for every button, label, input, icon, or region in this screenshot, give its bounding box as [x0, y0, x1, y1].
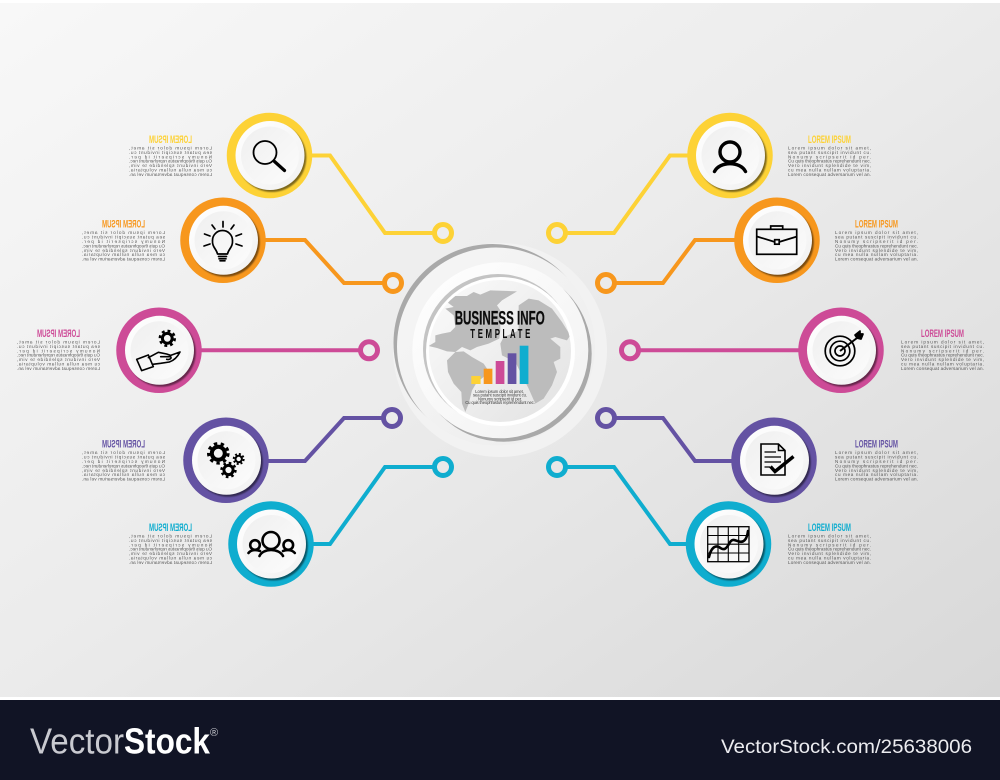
text block: sea putant suscipit invidunt cu.	[129, 150, 212, 155]
text block: Nonumy scripserit id per.	[82, 239, 165, 244]
text block: LOREM IPSUM	[855, 439, 898, 451]
coloured ring	[231, 117, 308, 194]
text block: cu mea nulla nullam voluptaria.	[788, 168, 871, 172]
text block: Lorem consequat adversarium vel an.	[901, 366, 984, 371]
coloured ring	[692, 117, 768, 194]
disc shadow	[239, 512, 308, 580]
panel: left pink node	[17, 312, 377, 389]
text block: Vero invidunt splendide te vim,	[82, 468, 165, 473]
white disc	[192, 426, 261, 495]
disc shadow	[809, 318, 878, 387]
white disc	[807, 316, 876, 385]
text block	[17, 328, 100, 371]
panel: right teal node	[548, 458, 871, 582]
connector	[566, 467, 695, 544]
text block	[835, 219, 918, 262]
world map continents	[429, 290, 570, 412]
centre caption: sea putant suscipit invidunt cu.	[473, 393, 527, 398]
text block: sea putant suscipit invidunt cu.	[82, 235, 165, 240]
coloured ring	[184, 202, 262, 279]
text block: Cu quis theophrastus reprehendunt nec.	[835, 463, 918, 468]
text block: Lorem ipsum dolor sit amet,	[835, 230, 918, 235]
text block: LOREM IPSUM	[102, 439, 145, 451]
text block: sea putant suscipit invidunt cu.	[17, 344, 100, 349]
end ring	[548, 224, 566, 242]
panel: left yellow node	[129, 117, 452, 242]
text block: Nonumy scripserit id per.	[129, 154, 212, 159]
grey crescent top-left	[394, 244, 592, 442]
inner face	[242, 515, 300, 573]
disc shadow	[745, 208, 814, 277]
text block: Lorem consequat adversarium vel an.	[788, 560, 871, 565]
disc shadow	[237, 123, 306, 192]
icon: line chart on grid	[708, 527, 749, 562]
footer logo: Vector	[30, 720, 124, 762]
text block: Cu quis theophrastus reprehendunt nec.	[835, 243, 918, 248]
coloured ring	[188, 422, 264, 499]
panel: central globe	[393, 243, 607, 457]
coloured ring	[738, 202, 816, 279]
panel: left orange node	[82, 202, 401, 292]
pale disc covering crescent	[397, 248, 595, 446]
text block: LOREM IPSUM	[149, 522, 192, 534]
text block: Cu quis theophrastus reprehendunt nec.	[788, 547, 871, 552]
end ring	[622, 342, 638, 359]
text block: Nonumy scripserit id per.	[835, 239, 918, 244]
text block: LOREM IPSUM	[102, 219, 145, 231]
text block	[788, 522, 871, 565]
globe rim white	[426, 277, 575, 426]
text block: Cu quis theophrastus reprehendunt nec.	[82, 243, 165, 248]
icon: magnifier	[254, 141, 284, 170]
text block	[835, 439, 918, 482]
text block: sea putant suscipit invidunt cu.	[129, 538, 212, 543]
inner face	[748, 211, 806, 269]
inner face	[812, 321, 870, 379]
text block: sea putant suscipit invidunt cu.	[901, 344, 984, 349]
connector	[258, 240, 384, 283]
icon: person	[714, 142, 746, 172]
connector	[615, 418, 740, 461]
white disc	[236, 121, 304, 190]
text block: LOREM IPSUM	[37, 328, 80, 340]
text block: sea putant suscipit invidunt cu.	[835, 235, 918, 240]
text block: LOREM IPSUM	[149, 134, 192, 146]
end ring	[360, 342, 378, 359]
centre caption: Nonumy scripserit id per.	[478, 396, 522, 401]
text block: LOREM IPSUM	[855, 219, 898, 231]
footer band	[0, 700, 1000, 780]
text block: Lorem ipsum dolor sit amet,	[129, 146, 212, 150]
inner face	[198, 431, 256, 489]
panel: right purple node	[598, 410, 918, 499]
text block	[129, 522, 212, 565]
globe face	[429, 280, 571, 422]
panel: right pink node	[622, 312, 984, 389]
connector	[195, 348, 360, 352]
text block: LOREM IPSUM	[808, 522, 851, 534]
text block: Lorem consequat adversarium vel an.	[17, 366, 100, 371]
text block: cu mea nulla nullam voluptaria.	[835, 472, 918, 477]
footer logo: Stock	[124, 720, 211, 762]
text block: Lorem consequat adversarium vel an.	[835, 257, 918, 262]
panel: right yellow node	[548, 117, 871, 242]
connector	[639, 348, 806, 352]
inner face	[130, 321, 188, 379]
icon: hand holding gear	[137, 331, 180, 371]
centre caption: Cu quis theophrastus reprehendunt nec.	[465, 400, 535, 405]
text block: Lorem ipsum dolor sit amet,	[17, 340, 100, 344]
text block: Lorem ipsum dolor sit amet,	[788, 534, 871, 538]
text block: sea putant suscipit invidunt cu.	[788, 538, 871, 543]
white disc	[189, 206, 258, 275]
white disc	[740, 426, 809, 495]
panel: left purple node	[82, 410, 400, 499]
text block: Vero invidunt splendide te vim,	[835, 248, 918, 253]
connector	[615, 240, 742, 283]
centre caption	[465, 389, 535, 405]
text block: LOREM IPSUM	[921, 328, 964, 340]
end ring	[384, 274, 402, 292]
panel: left teal node	[129, 458, 452, 582]
text block: Lorem consequat adversarium vel an.	[82, 257, 165, 262]
text block: Nonumy scripserit id per.	[17, 348, 100, 353]
disc shadow	[191, 208, 260, 277]
end ring	[434, 458, 452, 476]
disc shadow	[127, 318, 196, 387]
text block: Lorem ipsum dolor sit amet,	[129, 534, 212, 538]
text block: Lorem ipsum dolor sit amet,	[82, 230, 165, 235]
inner face	[241, 126, 299, 184]
white disc	[125, 316, 194, 385]
inner face	[194, 211, 252, 269]
globe rim crescent	[423, 274, 573, 424]
icon: target with arrow	[825, 331, 863, 366]
connector	[566, 156, 695, 233]
bar chart	[471, 346, 528, 384]
disc shadow	[194, 428, 263, 497]
text block: Lorem consequat adversarium vel an.	[129, 172, 212, 177]
text block: Nonumy scripserit id per.	[82, 459, 165, 464]
disc shadow	[742, 428, 811, 497]
text block: Lorem ipsum dolor sit amet,	[788, 146, 871, 150]
end ring	[548, 458, 566, 476]
text block: cu mea nulla nullam voluptaria.	[17, 362, 100, 366]
text block: Cu quis theophrastus reprehendunt nec.	[129, 159, 212, 164]
text block: sea putant suscipit invidunt cu.	[835, 455, 918, 460]
white inner disc	[412, 262, 588, 438]
coloured ring	[736, 422, 812, 499]
coloured ring	[690, 506, 767, 582]
connector	[305, 156, 434, 233]
footer logo: ®	[210, 727, 218, 739]
text block: Nonumy scripserit id per.	[129, 542, 212, 547]
text block: Lorem ipsum dolor sit amet,	[82, 450, 165, 455]
text block: Vero invidunt splendide te vim,	[901, 357, 984, 362]
disc shadow	[696, 512, 765, 580]
coloured ring	[232, 506, 310, 582]
coloured ring	[120, 312, 198, 389]
text block: Lorem consequat adversarium vel an.	[788, 172, 871, 177]
text block: Nonumy scripserit id per.	[901, 348, 984, 353]
footer logo	[30, 720, 218, 762]
panel: right orange node	[598, 202, 918, 292]
text block: LOREM IPSUM	[808, 134, 851, 146]
end ring	[598, 274, 614, 292]
text block: Vero invidunt splendide te vim,	[17, 357, 100, 362]
text block: cu mea nulla nullam voluptaria.	[82, 252, 165, 257]
footer url: VectorStock.com/25638006	[721, 736, 972, 758]
text block: Vero invidunt splendide te vim,	[129, 551, 212, 556]
text block: Lorem consequat adversarium vel an.	[835, 477, 918, 482]
icon: briefcase	[757, 226, 797, 254]
text block	[82, 219, 165, 262]
text block: Vero invidunt splendide te vim,	[788, 163, 871, 168]
text block: Cu quis theophrastus reprehendunt nec.	[129, 547, 212, 552]
text block: Cu quis theophrastus reprehendunt nec.	[788, 159, 871, 164]
inner face	[702, 126, 760, 184]
text block: Vero invidunt splendide te vim,	[835, 468, 918, 473]
text block: sea putant suscipit invidunt cu.	[788, 150, 871, 155]
icon: light bulb	[204, 222, 242, 261]
connector	[305, 467, 434, 544]
white disc	[743, 206, 812, 275]
text block: cu mea nulla nullam voluptaria.	[129, 556, 212, 560]
text block: Nonumy scripserit id per.	[788, 154, 871, 159]
end ring	[598, 410, 614, 426]
text block: sea putant suscipit invidunt cu.	[82, 455, 165, 460]
subtitle: TEMPLATE	[470, 327, 530, 342]
text block: Nonumy scripserit id per.	[788, 542, 871, 547]
text block: Vero invidunt splendide te vim,	[129, 163, 212, 168]
text block: Lorem consequat adversarium vel an.	[129, 560, 212, 565]
text block	[788, 134, 871, 177]
text block	[129, 134, 212, 177]
end ring	[434, 224, 452, 242]
text block: Nonumy scripserit id per.	[835, 459, 918, 464]
white disc	[696, 121, 765, 190]
inner face	[700, 515, 758, 573]
white disc	[237, 510, 306, 578]
text block: cu mea nulla nullam voluptaria.	[788, 556, 871, 560]
inner face	[746, 431, 804, 489]
text block: Vero invidunt splendide te vim,	[82, 248, 165, 253]
icon: gears	[208, 444, 244, 477]
text block: Lorem consequat adversarium vel an.	[82, 477, 165, 482]
text block	[901, 328, 984, 371]
text block: cu mea nulla nullam voluptaria.	[129, 168, 212, 172]
coloured ring	[802, 312, 880, 389]
grey crescent bottom-right	[416, 266, 592, 442]
text block: cu mea nulla nullam voluptaria.	[901, 362, 984, 366]
title: BUSINESS INFO	[455, 308, 545, 330]
text block: Cu quis theophrastus reprehendunt nec.	[82, 463, 165, 468]
icon: people	[248, 532, 295, 556]
text block: cu mea nulla nullam voluptaria.	[82, 472, 165, 477]
outer pale disc	[393, 243, 607, 457]
end ring	[384, 410, 400, 426]
text block: Vero invidunt splendide te vim,	[788, 551, 871, 556]
white disc	[694, 510, 764, 578]
text block: Cu quis theophrastus reprehendunt nec.	[901, 353, 984, 358]
text block: cu mea nulla nullam voluptaria.	[835, 252, 918, 257]
centre caption: Lorem ipsum dolor sit amet,	[475, 389, 524, 394]
text block: Lorem ipsum dolor sit amet,	[835, 450, 918, 455]
text block	[82, 439, 165, 482]
text block: Cu quis theophrastus reprehendunt nec.	[17, 353, 100, 358]
icon: document with check	[761, 444, 794, 475]
connector	[262, 418, 383, 461]
text block: Lorem ipsum dolor sit amet,	[901, 340, 984, 344]
disc shadow	[698, 123, 767, 192]
